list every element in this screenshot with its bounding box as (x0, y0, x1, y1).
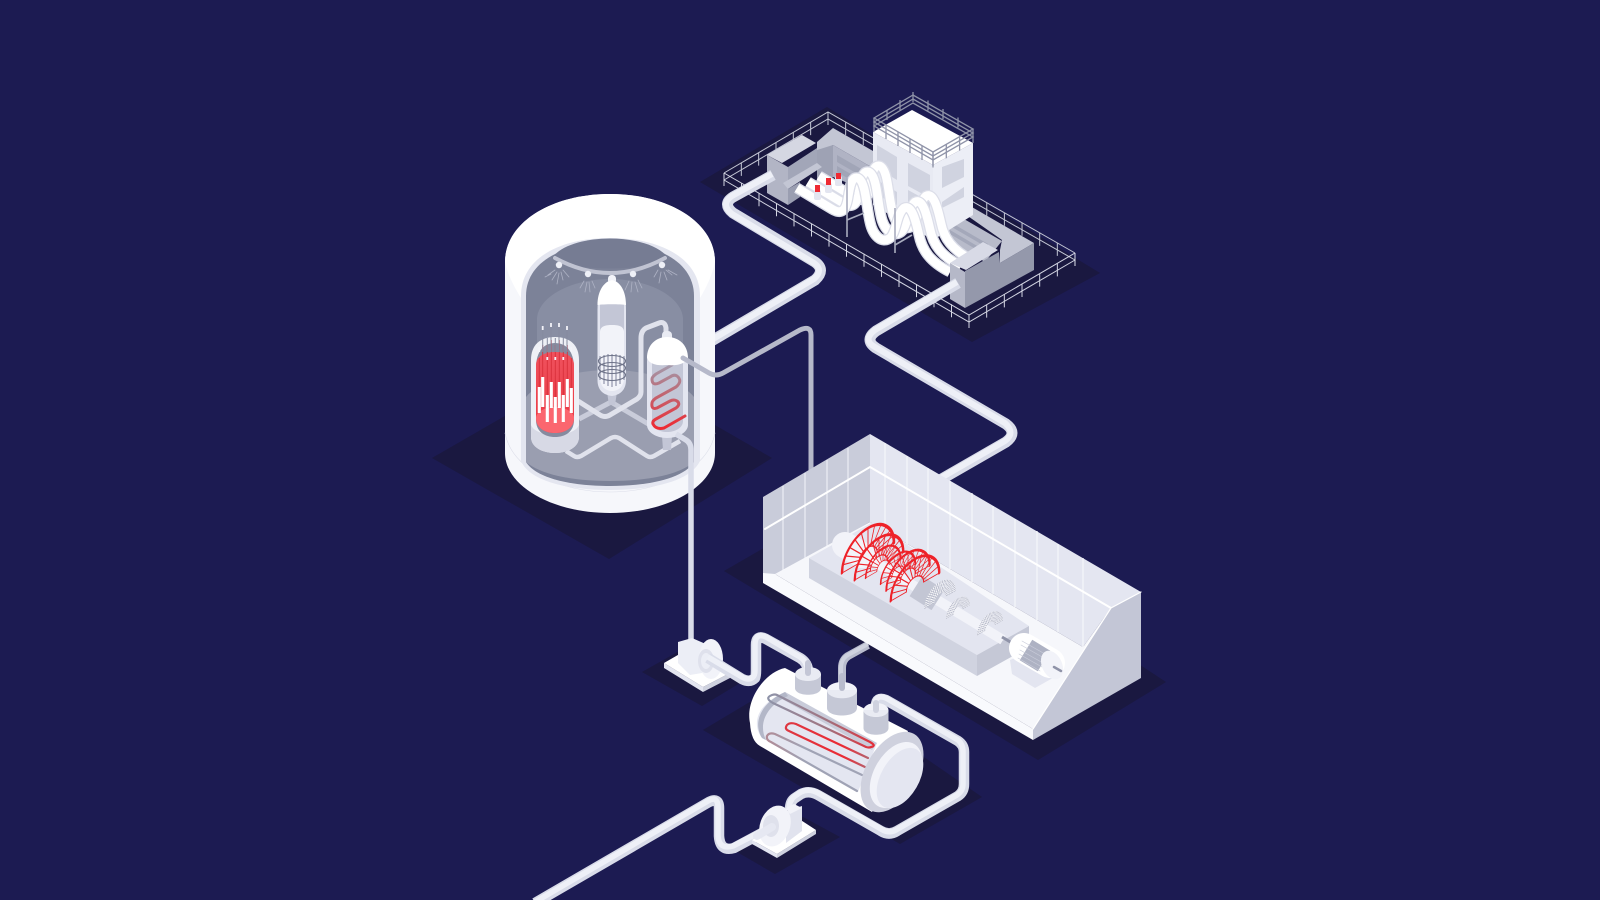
ramped end wall (1033, 592, 1141, 740)
condenser valve 1 (795, 663, 821, 695)
floor (526, 370, 694, 481)
valve 1 (814, 185, 821, 200)
ground shadows (432, 107, 1166, 874)
inner dome glow (537, 279, 683, 400)
pump 2 inlet pipe end (757, 827, 772, 836)
frame posts rear (847, 160, 928, 215)
wall rail (765, 467, 1111, 608)
heat exchange coil (652, 365, 685, 428)
spray nozzles (556, 262, 665, 277)
pipe: turbine to condenser (841, 644, 868, 688)
water pipes with valves (797, 166, 972, 272)
fuel core (536, 352, 574, 433)
control rod basket (598, 354, 626, 387)
feedwater pipe (676, 434, 691, 642)
rear fence (724, 112, 1075, 266)
containment body (505, 194, 715, 513)
valve 2 (825, 178, 832, 193)
primary steam pipe (683, 328, 811, 475)
condenser end cap (847, 721, 937, 823)
condenser valve 3 (864, 703, 888, 735)
spray rail (555, 258, 665, 273)
condenser (749, 663, 937, 823)
containment dome (505, 194, 715, 298)
water sprays (545, 270, 677, 292)
high pressure turbine blades (842, 513, 939, 601)
pump 2 (752, 801, 816, 858)
pump 1 (664, 638, 730, 692)
reactor containment (505, 194, 715, 513)
right outlet block (950, 242, 1034, 308)
condenser valve 2 (827, 676, 857, 716)
low pressure turbine blades (925, 574, 1002, 635)
left wall (763, 434, 870, 582)
building (873, 110, 973, 240)
back wall (526, 243, 694, 486)
pressurizer vessel (598, 275, 626, 405)
valve 3 (835, 173, 842, 186)
back wall (870, 434, 1141, 647)
roof railing (874, 92, 973, 168)
condenser shell (749, 668, 908, 812)
containment opening ring (521, 238, 700, 490)
pipe: cooling plant to turbine hall (868, 282, 1012, 480)
steam generator (647, 331, 688, 450)
floor (775, 522, 1111, 729)
generator (1010, 641, 1067, 688)
turbine pedestal (809, 522, 1029, 676)
condenser tubes (767, 694, 874, 791)
pipe: reactor to cooling plant (708, 174, 820, 343)
pipe: condenser loop to pump 2 (789, 697, 964, 834)
left intake block (767, 135, 822, 205)
pipe support frames (847, 178, 912, 253)
cooling water plant (724, 92, 1075, 328)
turbine shaft (845, 545, 1012, 643)
control rods (539, 340, 571, 397)
turbine hall (763, 434, 1141, 740)
reactor core vessel (531, 323, 579, 453)
cutaway interior (757, 692, 877, 792)
primary coolant pipes (566, 323, 680, 457)
rear basin walls (817, 128, 1034, 263)
pipe: outfall to pump 2 (535, 799, 775, 900)
front fence (724, 173, 1075, 328)
pipe: pump 1 to condenser (708, 636, 808, 681)
